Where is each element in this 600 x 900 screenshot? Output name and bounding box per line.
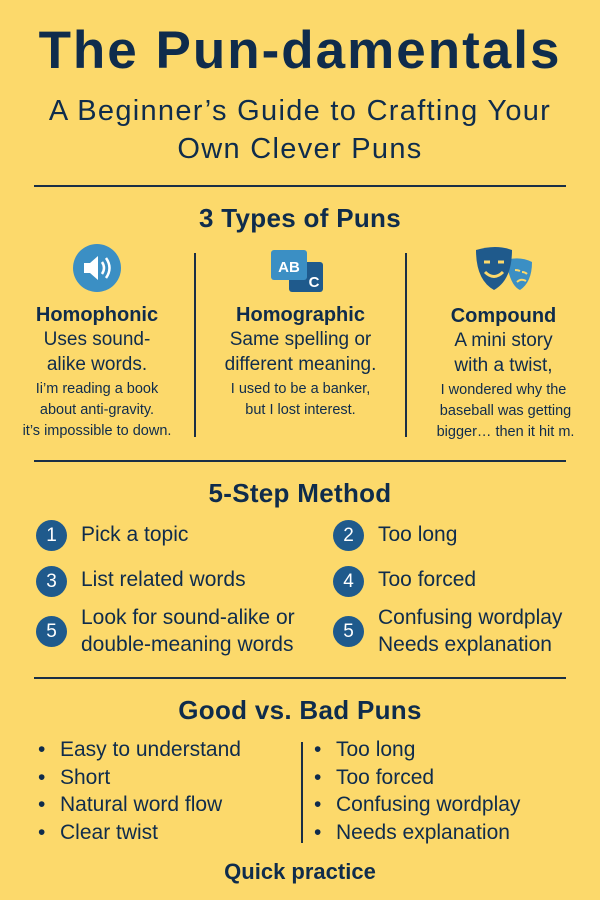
- step 2: Too long: [378, 523, 457, 546]
- panel: homographic: I used to be a banker,: [231, 381, 370, 397]
- step 5: [36, 606, 295, 656]
- list: good puns: Clear twist: [60, 820, 158, 844]
- step 3: 3: [46, 571, 57, 592]
- step 5: double-meaning words: [81, 633, 293, 656]
- heading: 5-step method: 5-Step Method: [208, 478, 392, 508]
- panel: compound: I wondered why the: [441, 382, 566, 398]
- icon: speaker: [73, 244, 121, 292]
- list: good puns: Natural word flow: [60, 793, 222, 816]
- step 2: 2: [343, 525, 354, 546]
- step 2: [333, 520, 457, 551]
- step 3: [36, 566, 246, 597]
- panel: compound: [437, 247, 574, 440]
- list: bad puns: Too long: [336, 738, 415, 761]
- step 5b: [333, 606, 562, 656]
- step 1: 1: [46, 525, 57, 546]
- icon: theatre masks: [476, 247, 532, 290]
- list: good puns: [38, 738, 241, 844]
- panel: compound: A mini story: [454, 330, 553, 351]
- panel: homographic: [225, 250, 376, 418]
- icon: AB C letters: AB: [278, 259, 299, 276]
- panel: homographic: Same spelling or: [230, 329, 371, 350]
- panel: homophonic: Ii’m reading a book: [36, 381, 158, 397]
- step 1: Pick a topic: [81, 523, 188, 546]
- icon: AB C letters: [271, 250, 323, 292]
- subtitle: [49, 95, 551, 165]
- subtitle: Own Clever Puns: [177, 133, 423, 165]
- panel: compound: bigger… then it hit m.: [437, 424, 574, 440]
- panel: homophonic: alike words.: [47, 354, 147, 375]
- panel: compound: baseball was getting: [440, 403, 571, 419]
- step 5b: Needs explanation: [378, 633, 552, 656]
- divider: [194, 253, 196, 437]
- step 1: [36, 520, 188, 551]
- title: The Pun-damentals: [39, 21, 561, 80]
- divider: [301, 742, 303, 843]
- step 4: Too forced: [378, 568, 476, 591]
- panel: homophonic: it’s impossible to down.: [23, 423, 171, 439]
- list: bad puns: Confusing wordplay: [336, 793, 520, 816]
- panel: compound: Compound: [451, 305, 556, 327]
- step 4: 4: [343, 571, 354, 592]
- step 5b: Confusing wordplay: [378, 606, 562, 629]
- panel: homophonic: about anti-gravity.: [40, 402, 154, 418]
- panel: homographic: different meaning.: [225, 354, 376, 375]
- heading: 3 types of puns: 3 Types of Puns: [199, 203, 401, 233]
- panel: homographic: but I lost interest.: [245, 402, 356, 418]
- step 3: List related words: [81, 568, 246, 591]
- list: good puns: Short: [60, 766, 110, 788]
- subtitle: A Beginner’s Guide to Crafting Your: [49, 95, 551, 127]
- heading: good vs bad: Good vs. Bad Puns: [178, 695, 422, 725]
- panel: homographic: Homographic: [236, 304, 365, 326]
- list: bad puns: [314, 738, 520, 844]
- list: bad puns: Needs explanation: [336, 820, 510, 844]
- panel: compound: with a twist,: [454, 355, 553, 376]
- footer: quick practice: Quick practice: [224, 859, 376, 884]
- list: bad puns: Too forced: [336, 766, 434, 788]
- step 5: Look for sound-alike or: [81, 606, 295, 629]
- step 5: 5: [46, 621, 57, 642]
- step 5b: 5: [343, 621, 354, 642]
- step 4: [333, 566, 476, 597]
- panel: homophonic: Homophonic: [36, 304, 158, 326]
- list: good puns: Easy to understand: [60, 738, 241, 761]
- icon: AB C letters: C: [308, 274, 319, 291]
- panel: homophonic: [23, 244, 171, 439]
- panel: homophonic: Uses sound-: [44, 329, 150, 350]
